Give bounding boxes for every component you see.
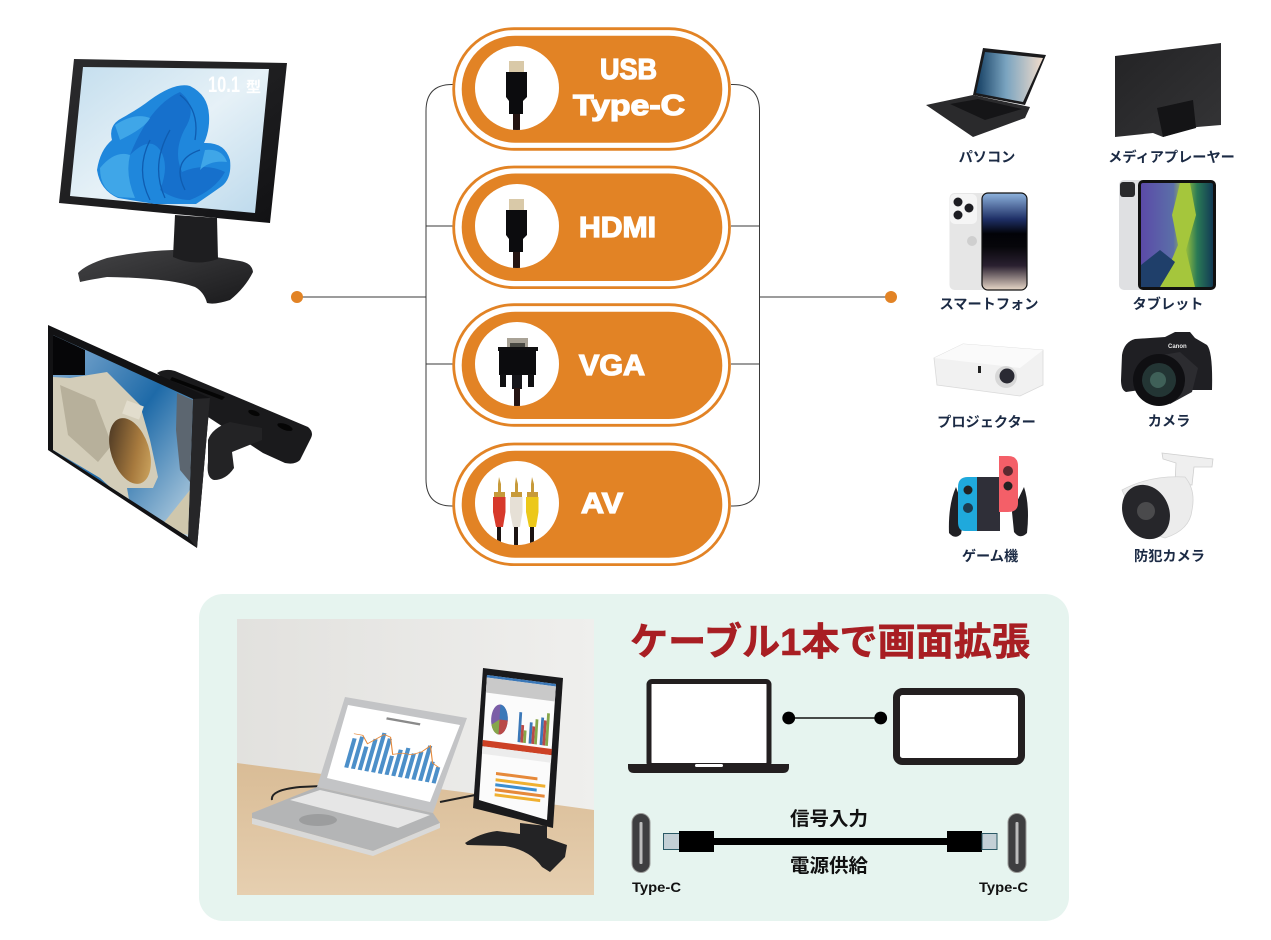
monitor stand	[465, 823, 567, 872]
icon: link between devices	[782, 712, 887, 724]
right bracket	[731, 84, 760, 506]
label: タブレット	[1133, 296, 1203, 313]
stand neck	[173, 215, 218, 263]
AV label: AV	[581, 488, 624, 520]
stand base	[78, 250, 253, 304]
USB label: USB	[600, 54, 657, 86]
brand mark: Canon	[1168, 344, 1187, 350]
blue bloom wallpaper	[97, 85, 230, 204]
lens barrel	[1145, 352, 1198, 404]
left Type-C label: Type-C	[632, 879, 681, 895]
right orange dot	[885, 291, 897, 303]
device: game console	[949, 456, 1028, 565]
size label: 10.1	[208, 72, 240, 97]
left bracket	[426, 84, 453, 506]
label: ゲーム機	[962, 548, 1018, 565]
icon: Type-C cable	[664, 831, 997, 852]
VGA plug icon	[498, 338, 538, 408]
RCA plugs icon	[493, 477, 538, 547]
monitor screen	[479, 675, 556, 820]
signal label: 信号入力	[790, 808, 868, 830]
branch lines	[297, 226, 891, 364]
size unit: 型	[246, 79, 261, 96]
connector lines	[297, 84, 891, 506]
icon: laptop	[628, 682, 789, 773]
device: tablet	[1119, 180, 1216, 313]
device: smartphone	[940, 193, 1038, 313]
label: 防犯カメラ	[1134, 548, 1205, 565]
monitor with headrest mount	[48, 325, 312, 548]
USB Type-C pill	[454, 29, 730, 149]
cable	[272, 786, 475, 802]
device: PC	[926, 48, 1046, 166]
label: メディアプレーヤー	[1108, 149, 1235, 166]
monitor bezel	[473, 668, 563, 828]
HDMI label: HDMI	[579, 212, 656, 244]
heading: ケーブル1本で画面拡張	[630, 621, 1030, 664]
AV pill	[454, 444, 730, 565]
VGA pill	[454, 305, 730, 425]
icon: left Type-C port	[632, 814, 650, 872]
mount arm	[157, 370, 312, 464]
device: projector	[934, 344, 1043, 431]
icon: right Type-C port	[1008, 814, 1026, 872]
swivel joint	[208, 422, 262, 480]
USB plug icon	[506, 61, 527, 134]
device: media player	[1108, 43, 1235, 166]
monitor on desk stand	[59, 59, 287, 304]
HDMI pill	[454, 167, 730, 288]
panel: single cable screen extension	[199, 594, 1069, 921]
HDMI plug icon	[506, 199, 527, 272]
space photo	[53, 335, 193, 537]
photo: laptop and monitor on desk	[237, 619, 594, 895]
Type-C label: Type-C	[573, 90, 685, 122]
right Type-C label: Type-C	[979, 879, 1028, 895]
label: カメラ	[1148, 414, 1190, 430]
device: camera	[1121, 332, 1212, 430]
device: security camera	[1113, 453, 1213, 565]
label: スマートフォン	[940, 297, 1038, 313]
laptop base	[252, 787, 440, 851]
left orange dot	[291, 291, 303, 303]
icon: display	[896, 692, 1022, 762]
bezel side	[188, 398, 210, 548]
spreadsheet and slide	[479, 675, 556, 803]
label: パソコン	[959, 150, 1015, 166]
label: プロジェクター	[937, 415, 1036, 431]
VGA label: VGA	[579, 350, 645, 382]
power label: 電源供給	[790, 855, 868, 877]
bezel	[48, 325, 210, 548]
laptop chart	[344, 713, 451, 784]
laptop lid	[317, 697, 467, 813]
mount slots	[170, 377, 294, 433]
bezel	[59, 59, 287, 223]
screen	[70, 67, 269, 213]
